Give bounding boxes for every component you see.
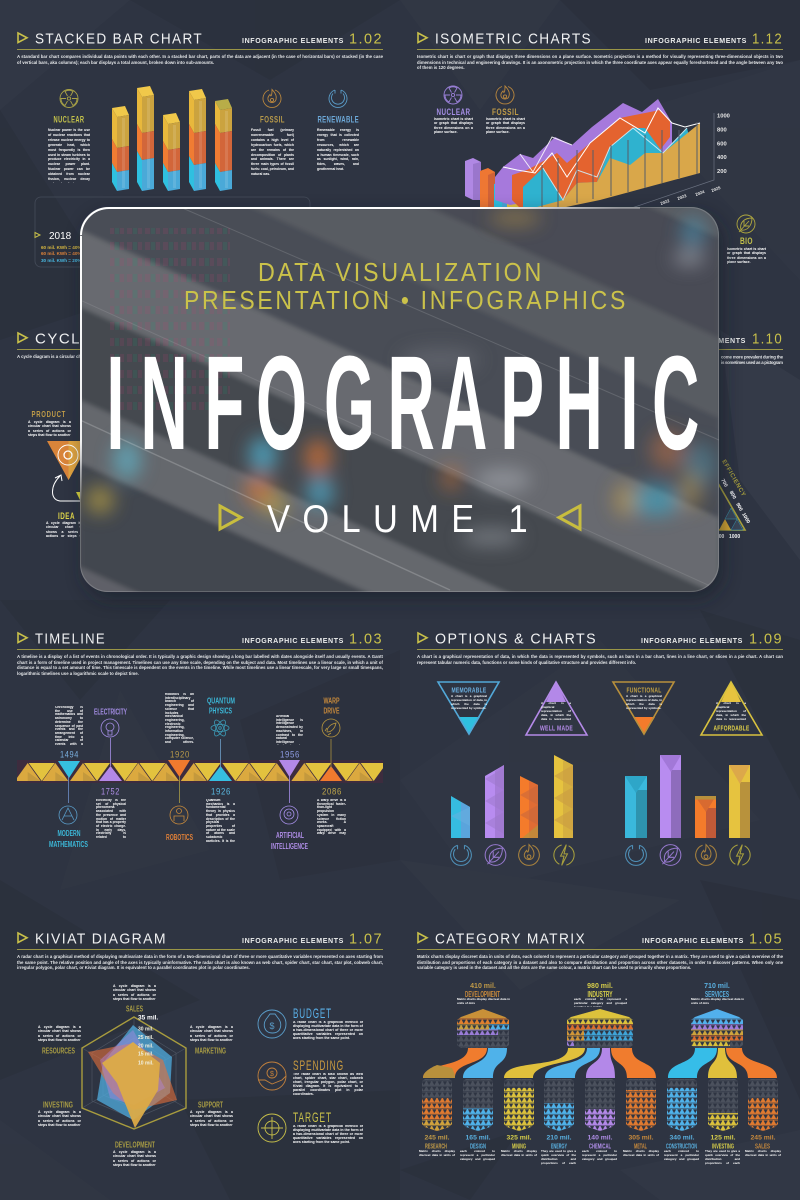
bar 3 xyxy=(163,113,180,191)
column labels: ENERGY xyxy=(551,1144,567,1150)
pyramid chart: 900 xyxy=(734,502,744,512)
group headers: 410 mil. xyxy=(470,983,496,990)
section heading: stacked bar chart xyxy=(17,30,383,50)
event: 2086 xyxy=(317,696,346,835)
event: 1956: ARTIFICIAL xyxy=(276,831,304,840)
radar chart xyxy=(82,1014,186,1129)
text: investing: A cycle diagram is a circular chart that shows a series of actions or steps that flow to another xyxy=(38,1110,81,1127)
bar: purple flat xyxy=(660,755,681,838)
section heading: options and charts xyxy=(417,630,783,650)
icon row xyxy=(451,845,750,865)
bar 2 xyxy=(137,86,154,191)
event: 1752 xyxy=(94,708,127,838)
cover triangle left xyxy=(220,506,241,529)
section heading: stacked bar chart: 1.02 xyxy=(349,30,383,47)
icon: fossil xyxy=(263,90,281,107)
radar labels: MARKETING xyxy=(195,1046,226,1056)
column labels: METAL xyxy=(634,1144,647,1150)
section heading: stacked bar chart: INFOGRAPHIC ELEMENTS xyxy=(242,38,344,45)
pyramid chart: 900 xyxy=(716,534,725,540)
icon: fossil xyxy=(496,86,514,104)
badge: affordable xyxy=(701,681,762,735)
text: resources: A cycle diagram is a circular chart that shows a series of actions or steps that flow to another xyxy=(38,1025,81,1042)
pyramid chart: 800 xyxy=(728,490,737,500)
badge: well made: WELL MADE xyxy=(540,724,573,732)
glass edge highlight top xyxy=(81,208,640,235)
panel: timeline xyxy=(15,630,387,851)
section heading: 1.10 xyxy=(417,330,783,350)
radar chart: 15 mil. xyxy=(138,1052,154,1058)
summary: 2018: 60 mil. KWh = 40% xyxy=(41,245,81,250)
column notes xyxy=(419,1150,781,1166)
grid posts xyxy=(542,122,697,210)
event: 1956: 1956 xyxy=(280,750,300,760)
section heading: options and charts: OPTIONS & CHARTS xyxy=(435,630,597,647)
chart axis: 1000 xyxy=(717,114,730,120)
timeline band xyxy=(15,760,387,783)
series: cyan xyxy=(523,128,690,212)
text: sales: A cycle diagram is a circular chart that shows a series of actions or steps that flow to another xyxy=(113,984,156,1001)
icon: nuclear xyxy=(444,86,462,104)
section heading: category matrix: CATEGORY MATRIX xyxy=(435,930,586,947)
triangle shading xyxy=(28,772,373,781)
section heading: timeline: INFOGRAPHIC ELEMENTS xyxy=(242,638,344,645)
chart axis: 2023 xyxy=(677,193,688,201)
event: 2086: 2086 xyxy=(322,786,342,798)
down triangles xyxy=(29,763,387,781)
section heading: category matrix xyxy=(417,930,783,950)
event: 1926: 1926 xyxy=(211,786,231,798)
columns xyxy=(422,1079,778,1131)
bar: orange xyxy=(520,776,538,838)
section heading: kiviat diagram: KIVIAT DIAGRAM xyxy=(35,930,167,947)
flows xyxy=(423,1048,777,1078)
column labels: RESEARCH xyxy=(425,1144,447,1150)
column values: 325 mil. xyxy=(507,1134,532,1142)
badge: memorable: MEMORABLE xyxy=(452,686,486,694)
event: 1920: ROBOTICS xyxy=(166,833,193,842)
column values xyxy=(425,1134,776,1142)
label: product: PRODUCT xyxy=(32,409,66,419)
chart axis: 200 xyxy=(717,169,727,175)
section heading: options and charts: INFOGRAPHIC ELEMENTS xyxy=(641,638,743,645)
text: nuclear: Isometric chart is chart or graph that displays three dimensions on a plane surface. xyxy=(434,117,473,134)
column labels: DESIGN xyxy=(470,1144,486,1150)
column labels: MINING xyxy=(512,1144,526,1150)
panel: options and charts xyxy=(417,630,783,865)
block: budget: BUDGET xyxy=(293,1005,332,1021)
intro text: come more prevalent during the xyxy=(721,354,784,360)
pyramid chart xyxy=(680,452,751,540)
text: bio: Isometric chart is chart or graph that displays three dimensions on a plane surface. xyxy=(727,247,766,264)
panel: isometric charts xyxy=(417,30,783,265)
badge: memorable xyxy=(438,682,499,735)
up triangles xyxy=(15,763,373,781)
badge: functional xyxy=(613,682,674,735)
glass cover panel xyxy=(80,207,719,592)
text: development: A cycle diagram is a circular chart that shows a series of actions or steps that flow to another xyxy=(113,1150,156,1167)
column labels: INVESTING xyxy=(712,1144,734,1150)
chart axis: 800 xyxy=(717,128,727,134)
event: 1926 xyxy=(206,696,235,842)
section heading: timeline xyxy=(17,630,383,650)
event: 2086: WARP xyxy=(324,696,340,706)
section heading: isometric charts: INFOGRAPHIC ELEMENTS xyxy=(645,38,747,45)
intro text: A standard bar chart compares individual data points with each other. In a stacked bar chart, parts of the data are adjacent (in the case of horizontal bars) or stacked (in the case of vertical bars, aka columns); each bar displays a total amount, broken down into sub-amounts. xyxy=(17,54,383,65)
label: fossil: FOSSIL xyxy=(260,114,285,126)
chart axis: 2022 xyxy=(660,198,671,206)
event: 1920 xyxy=(165,693,194,842)
event: 1956: INTELLIGENCE xyxy=(271,842,308,851)
intro text: A chart is a graphical representation of data, in which the data is represented by symbols, such as bars in a bar chart, lines in a line chart, or slices in a pie chart. A chart can represent tabular numeric data, functions or some kinds of qualitative structure and provides different info. xyxy=(417,654,783,665)
group headers: 980 mil. xyxy=(587,983,613,990)
panel: cycle diagram xyxy=(17,330,383,539)
block: spending: $ xyxy=(270,1071,274,1078)
radar labels: INVESTING xyxy=(43,1100,73,1110)
section heading: kiviat diagram: 1.07 xyxy=(349,930,383,947)
section heading: isometric charts: ISOMETRIC CHARTS xyxy=(435,30,592,47)
label: nuclear: NUCLEAR xyxy=(436,107,470,118)
glass background xyxy=(80,207,719,592)
intro text: Isometric chart is chart or graph that displays three dimensions on a plane surface. Isometric projection is a method for visually representing three-dimensional objects in two dimensions in technical and engineering drawings. It is an axonometric projection in which the three coordinate axes appear equally foreshortened and the angle between any two of them is 120 degrees. xyxy=(417,54,783,70)
intro text line 2: is sometimes used as a pictogram xyxy=(721,360,783,365)
cover subtitle line 2: PRESENTATION • INFOGRAPHICS xyxy=(184,287,628,315)
panel: category matrix xyxy=(417,930,783,1166)
series: orange xyxy=(512,110,670,208)
summary: 2018: 30 mil. KWh = 20% xyxy=(41,258,81,263)
summary: 2018: 60 mil. KWh = 40% xyxy=(41,251,81,256)
pyramid chart: 1000 xyxy=(729,534,740,540)
radar chart: 20 mil. xyxy=(138,1044,154,1050)
section heading: category matrix: INFOGRAPHIC ELEMENTS xyxy=(642,938,744,945)
text: renewable: Renewable energy is energy that is collected from renewable resources, which are naturally replenished on a human timescale, such as sunlight, wind, rain, tides, waves, and geothermal heat. xyxy=(317,128,359,171)
section heading: 1.10: 1.10 xyxy=(752,330,783,347)
idea triangle xyxy=(76,492,84,500)
light streaks xyxy=(80,207,719,590)
section heading: category matrix: 1.05 xyxy=(749,930,783,947)
pyramid chart: EFFICIENCY xyxy=(720,459,746,498)
event: 1920: 1920 xyxy=(170,750,190,760)
arrow xyxy=(52,475,85,501)
bar: yellow flat xyxy=(729,765,750,838)
section heading: timeline: 1.03 xyxy=(349,630,383,647)
column values: 245 mil. xyxy=(751,1134,776,1142)
label: bio: BIO xyxy=(740,236,753,247)
badge: well made xyxy=(526,681,587,735)
block: budget: $ xyxy=(270,1021,275,1031)
bar 1 xyxy=(112,106,129,191)
bar: cyan xyxy=(451,796,470,838)
label: renewable: RENEWABLE xyxy=(318,114,359,126)
matrix: development xyxy=(457,1009,509,1048)
intro text: A cycle diagram is a circular chart that shows a series of actions or steps that flow to another and can represent any process whose steps repeat in a continuous loop. xyxy=(17,354,358,359)
stacked bars xyxy=(112,86,232,191)
event: 1956 xyxy=(271,715,308,851)
intro text: A radar chart is a graphical method of displaying multivariate data in the form of a two-dimensional chart of three or more quantitative variables represented on axes starting from the same point. The relative position and angle of the axes is typically uninformative. The radar chart is also known as web chart, spider chart, star chart, star plot, cobweb chart, irregular polygon, polar chart, or Kiviat diagram. It is equivalent to a parallel coordinates plot in polar coordinates. xyxy=(17,954,383,970)
cover subtitle: DATA VISUALIZATION xyxy=(258,259,544,287)
bar 5 xyxy=(215,99,232,191)
event: 1752: ELECTRICITY xyxy=(94,708,127,716)
summary: 2018: 2018 xyxy=(49,231,72,242)
matrix: services xyxy=(691,1009,743,1048)
text: marketing: A cycle diagram is a circular chart that shows a series of actions or steps that flow to another xyxy=(190,1025,233,1042)
panel shadow xyxy=(84,214,723,599)
intro text: A timeline is a display of a list of events in chronological order. It is typically a graphic design showing a long bar labelled with dates alongside itself and usually events. A Gantt chart is a form of timeline used in project management. Timelines can use any time scale, depending on the subject and data. Most timelines use a linear scale, in which a unit of distance is equal to a set amount of time. This timescale is dependent on the events in the timeline. While most timelines use a linear timescale, for very large or small timespans, logarithmic timelines use a logarithmic scale to depict time. xyxy=(17,654,383,676)
panel: kiviat diagram xyxy=(17,930,383,1168)
radar chart: 10 mil. xyxy=(138,1060,154,1066)
block: target: TARGET xyxy=(293,1109,332,1125)
pyramid chart: 1000 xyxy=(740,512,751,525)
bar: purple xyxy=(485,765,504,838)
summary: 2018 xyxy=(35,231,81,263)
column values: 210 mil. xyxy=(547,1134,572,1142)
event: 1494 xyxy=(49,706,88,849)
badge: functional: FUNCTIONAL xyxy=(626,686,662,694)
section heading: timeline: TIMELINE xyxy=(35,630,106,647)
cover title: INFOGRAPHIC xyxy=(106,328,699,478)
column values: 140 mil. xyxy=(588,1134,613,1142)
bar: cyan flat xyxy=(625,776,647,838)
column labels: CONSTRUCTION xyxy=(666,1144,697,1150)
event: 1926: QUANTUM xyxy=(207,696,235,706)
group headers xyxy=(465,983,730,999)
column values: 305 mil. xyxy=(629,1134,654,1142)
block: spending xyxy=(258,1057,363,1095)
column values: 125 mil. xyxy=(711,1134,736,1142)
icon: renewable xyxy=(329,90,347,107)
icon: nuclear xyxy=(60,90,78,108)
radar labels: DEVELOPMENT xyxy=(115,1140,155,1150)
section heading: cycle xyxy=(17,330,383,350)
isometric columns xyxy=(465,158,522,212)
glass edge highlight left xyxy=(80,236,82,500)
chart axis: 600 xyxy=(717,142,727,148)
panel: pyramid 1.10 xyxy=(417,330,784,540)
column labels xyxy=(425,1144,770,1150)
bar: yellow xyxy=(554,755,573,838)
series lines xyxy=(503,108,700,200)
pyramid chart: 700 xyxy=(719,478,729,488)
text: product: A cycle diagram is a circular chart that shows a series of actions or steps that flow to another xyxy=(28,420,71,437)
group headers: DEVELOPMENT xyxy=(465,990,500,999)
block: spending: SPENDING xyxy=(293,1057,344,1073)
section heading: cycle: CYCLE xyxy=(35,330,93,347)
column values: 165 mil. xyxy=(466,1134,491,1142)
rounded summary box xyxy=(35,197,310,267)
text: support: A cycle diagram is a circular chart that shows a series of actions or steps that flow to another xyxy=(190,1110,233,1127)
highlighted markers xyxy=(58,761,80,778)
group headers: INDUSTRY xyxy=(588,990,613,999)
event: 1494: MATHEMATICS xyxy=(49,840,88,849)
panel: stacked bar chart xyxy=(17,30,383,267)
section heading: kiviat diagram: INFOGRAPHIC ELEMENTS xyxy=(242,938,344,945)
series: purple xyxy=(495,99,672,205)
section heading: isometric charts xyxy=(417,30,783,50)
radar labels: RESOURCES xyxy=(42,1046,75,1056)
section heading: isometric charts: 1.12 xyxy=(752,30,783,47)
bar: orange flat xyxy=(695,796,716,838)
matrix: industry xyxy=(567,1009,633,1048)
radar labels xyxy=(42,1004,226,1150)
column labels: SALES xyxy=(755,1144,770,1150)
label: fossil: FOSSIL xyxy=(492,107,519,118)
glass edge xyxy=(80,208,718,592)
label: nuclear: NUCLEAR xyxy=(54,114,84,126)
column values: 245 mil. xyxy=(425,1134,450,1142)
zigzag bars xyxy=(451,755,750,838)
product triangle xyxy=(47,441,90,480)
chart axis xyxy=(620,113,730,212)
ghost colour artefacts xyxy=(110,228,230,413)
cover volume: VOLUME 1 xyxy=(267,498,540,541)
event: 1926: PHYSICS xyxy=(209,706,232,716)
intro text: Matrix charts display discreet data in units of dots, each colored to represent a particular category and grouped together in a matrix. They are used to give a quick overview of the distribution and proportions of each category in a dataset and also to compare distribution and proportion across other datasets, in order to discover patterns. When only one variable category is used in the dataset and all the dots are the same colour, a matrix chart can be used to primarily show proportions. xyxy=(417,954,783,970)
radar chart: 25 mil. xyxy=(138,1035,154,1041)
cover triangle right xyxy=(559,506,580,529)
isometric area chart xyxy=(495,99,700,213)
event: 1752: 1752 xyxy=(101,786,120,798)
event: 2086: DRIVE xyxy=(324,706,340,716)
column values: 340 mil. xyxy=(670,1134,695,1142)
icon: bio xyxy=(737,215,755,233)
group headers: 710 mil. xyxy=(704,983,730,990)
event: 1494: 1494 xyxy=(60,750,79,760)
blurred colour patches xyxy=(86,210,716,546)
column labels: CHEMICAL xyxy=(589,1144,611,1150)
block: budget xyxy=(258,1005,363,1043)
radar labels: SUPPORT xyxy=(198,1100,223,1110)
event: 1494: MODERN xyxy=(58,829,81,838)
section heading: 1.10: INFOGRAPHIC ELEMENTS xyxy=(644,338,746,345)
text: fossil: Isometric chart is chart or graph that displays three dimensions on a plane surface. xyxy=(486,117,525,134)
section heading: kiviat diagram xyxy=(17,930,383,950)
badge: affordable: AFFORDABLE xyxy=(714,724,750,732)
radar chart: 30 mil. xyxy=(138,1026,154,1032)
section heading: stacked bar chart: STACKED BAR CHART xyxy=(35,30,203,47)
radar labels: SALES xyxy=(126,1004,143,1014)
chart axis: 400 xyxy=(717,155,727,161)
bar 4 xyxy=(189,89,206,191)
section heading: options and charts: 1.09 xyxy=(749,630,783,647)
chart axis: 2025 xyxy=(711,185,722,193)
text: fossil: Fossil fuel (primary nonrenewable fuel) contains a high level of hydrocarbon fuels, which are the remains of the decomposition of plants and animals. There are three main types of fossil fuels: coal, petroleum, and natural gas. xyxy=(251,128,294,175)
chart axis: 2024 xyxy=(695,189,706,197)
series: gold xyxy=(523,123,700,213)
label: idea: IDEA xyxy=(58,511,75,521)
group headers: SERVICES xyxy=(705,990,729,999)
block: target xyxy=(258,1109,363,1147)
radar chart: 35 mil. xyxy=(138,1014,158,1022)
